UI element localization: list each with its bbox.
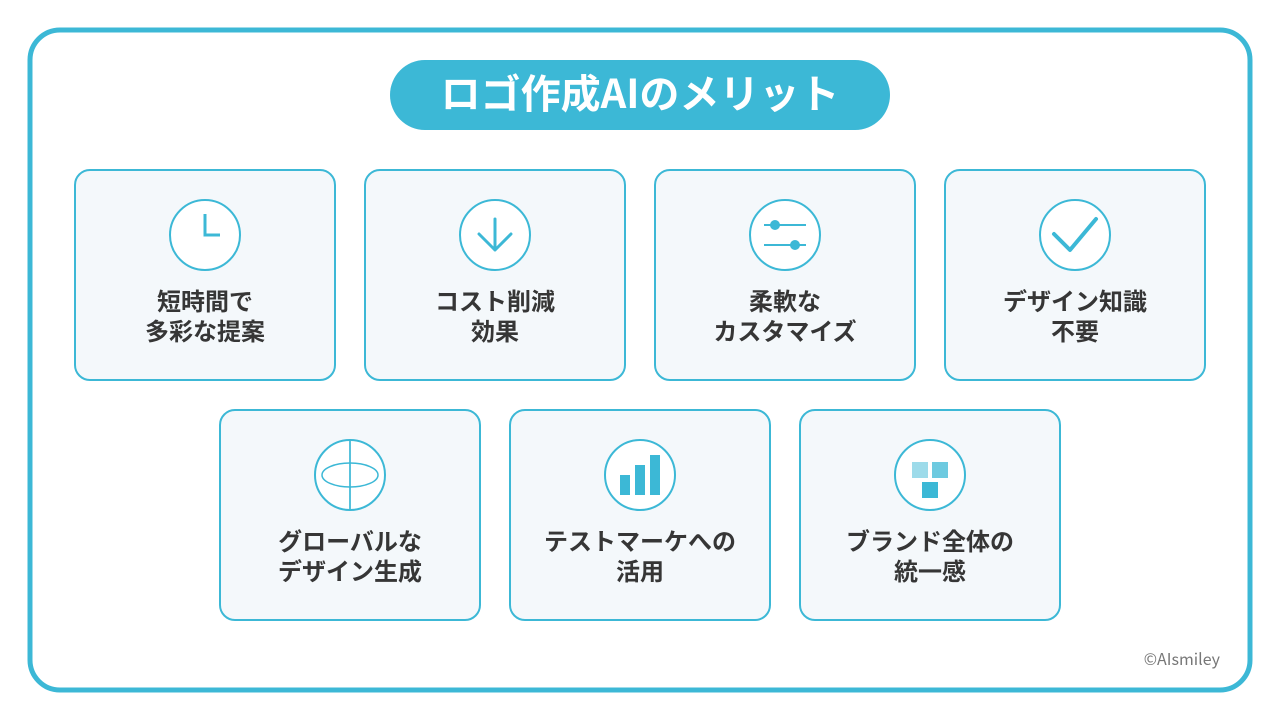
icon: bar chart bbox=[605, 440, 675, 510]
panel: no design knowledge bbox=[945, 170, 1205, 380]
label: test marketing: テストマーケへの bbox=[544, 522, 736, 557]
label: cost reduction: 効果 bbox=[471, 312, 519, 347]
label: flexible customization: 柔軟な bbox=[749, 282, 821, 317]
label: global design: デザイン生成 bbox=[278, 552, 422, 587]
label: no design knowledge: デザイン知識 bbox=[1003, 282, 1147, 317]
panel: brand unity bbox=[800, 410, 1060, 620]
icon: globe bbox=[315, 440, 385, 510]
icon: down arrow bbox=[460, 200, 530, 270]
label: brand unity: ブランド全体の bbox=[846, 522, 1014, 557]
label: global design: グローバルな bbox=[278, 522, 422, 557]
panel: cost reduction bbox=[365, 170, 625, 380]
panel: short time bbox=[75, 170, 335, 380]
panel: flexible customization bbox=[655, 170, 915, 380]
icon: three squares bbox=[895, 440, 965, 510]
panel: global design bbox=[220, 410, 480, 620]
label: test marketing: 活用 bbox=[616, 552, 664, 587]
panel: test marketing bbox=[510, 410, 770, 620]
label: brand unity: 統一感 bbox=[894, 552, 966, 587]
title: ロゴ作成AIのメリット bbox=[441, 62, 839, 120]
icon: sliders bbox=[750, 200, 820, 270]
label: short time: 短時間で bbox=[157, 282, 253, 317]
label: short time: 多彩な提案 bbox=[145, 312, 265, 347]
icon: clock bbox=[170, 200, 240, 270]
copyright: ©AIsmiley bbox=[1144, 646, 1221, 670]
label: cost reduction: コスト削減 bbox=[435, 282, 555, 317]
label: flexible customization: カスタマイズ bbox=[713, 312, 857, 347]
title bbox=[390, 60, 890, 130]
label: no design knowledge: 不要 bbox=[1051, 312, 1099, 347]
icon: check mark bbox=[1040, 200, 1110, 270]
